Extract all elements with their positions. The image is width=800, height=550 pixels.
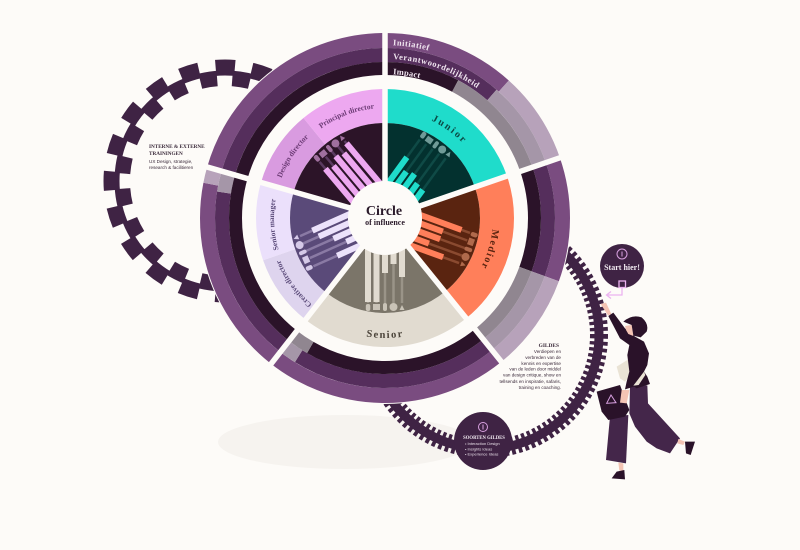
- wedge: medior: [273, 106, 497, 330]
- label: initiatief: Initiatief: [393, 40, 430, 50]
- illustration: woman reaching: [597, 303, 695, 479]
- text block: gildes: [499, 343, 561, 390]
- callout: soorten gildes: • Insights Ideas: [465, 446, 492, 452]
- text block: gildes: kennis en expertise: [521, 361, 561, 366]
- label: design director: Design director: [277, 135, 308, 178]
- label: senior manager: Senior manager: [270, 198, 278, 250]
- ring: inner band: [236, 68, 534, 368]
- floor shadow: [218, 415, 472, 469]
- text block: gildes: Verdiepen en: [534, 349, 561, 354]
- label: senior: Senior: [366, 330, 402, 338]
- ring: middle band: [222, 55, 548, 381]
- text block: interne en externe trainingen: UX Design, strategie,: [149, 159, 192, 164]
- text block: gildes: van design critique, show en: [503, 372, 561, 378]
- callout: soorten gildes: • Interaction Design: [465, 441, 500, 446]
- center circle: [348, 181, 422, 255]
- label: medior: Medior: [482, 229, 499, 268]
- ring: outer band: [208, 40, 562, 396]
- icon: info: [617, 249, 627, 259]
- disc mask: [199, 32, 571, 404]
- callout: soorten gildes: [454, 412, 512, 470]
- callout: soorten gildes: • Experience Ideas: [465, 452, 498, 456]
- label: creative director: Creative director: [277, 261, 311, 307]
- label: junior: Junior: [432, 115, 466, 142]
- center title: [365, 204, 405, 227]
- ring and role labels: [270, 40, 499, 338]
- chart: senior bars: [366, 248, 404, 311]
- text block: gildes: training en coaching.: [519, 385, 561, 390]
- label: impact: Impact: [393, 68, 420, 78]
- chart: directors bars: [313, 133, 382, 205]
- text block: interne en externe trainingen: TRAININGEN: [149, 151, 183, 157]
- arrow: start pointer: [606, 281, 626, 298]
- icon: info: [478, 422, 488, 432]
- wedge: creative director and senior manager: [273, 106, 497, 330]
- chart: medior bars: [407, 212, 478, 268]
- text block: interne en externe trainingen: [149, 144, 205, 170]
- text block: gildes: van de leden door middel: [509, 366, 561, 372]
- wedge: junior: [273, 106, 497, 330]
- text block: gildes: GILDES: [539, 343, 559, 349]
- dividers: [204, 30, 563, 366]
- chart: junior bars: [386, 131, 453, 203]
- gear track: right guilds rail: [371, 221, 599, 449]
- outer rings: [208, 40, 562, 396]
- role wedges: [273, 106, 497, 330]
- text block: interne en externe trainingen: INTERNE & EXTERNE: [149, 144, 205, 150]
- gear track: left trainings: [102, 58, 348, 304]
- text block: gildes: verbreden van de: [525, 355, 561, 360]
- text block: gildes: tellsends en inspiratie, safaris,: [499, 379, 561, 384]
- callout: start hier: Start hier!: [604, 263, 640, 272]
- wedge: design director and principal director: [273, 106, 497, 330]
- wedge: senior: [273, 106, 497, 330]
- label: verantwoordelijkheid: Verantwoordelijkheid: [393, 54, 480, 88]
- chart: manager bars: [292, 211, 365, 271]
- callout: soorten gildes: SOORTEN GILDES: [463, 436, 505, 441]
- label: principal director: Principal director: [318, 105, 374, 128]
- center title: Circle: [366, 204, 402, 219]
- center title: of influence: [365, 218, 405, 227]
- text block: interne en externe trainingen: research & facilitieren: [149, 165, 194, 170]
- callout: start hier: [600, 244, 644, 288]
